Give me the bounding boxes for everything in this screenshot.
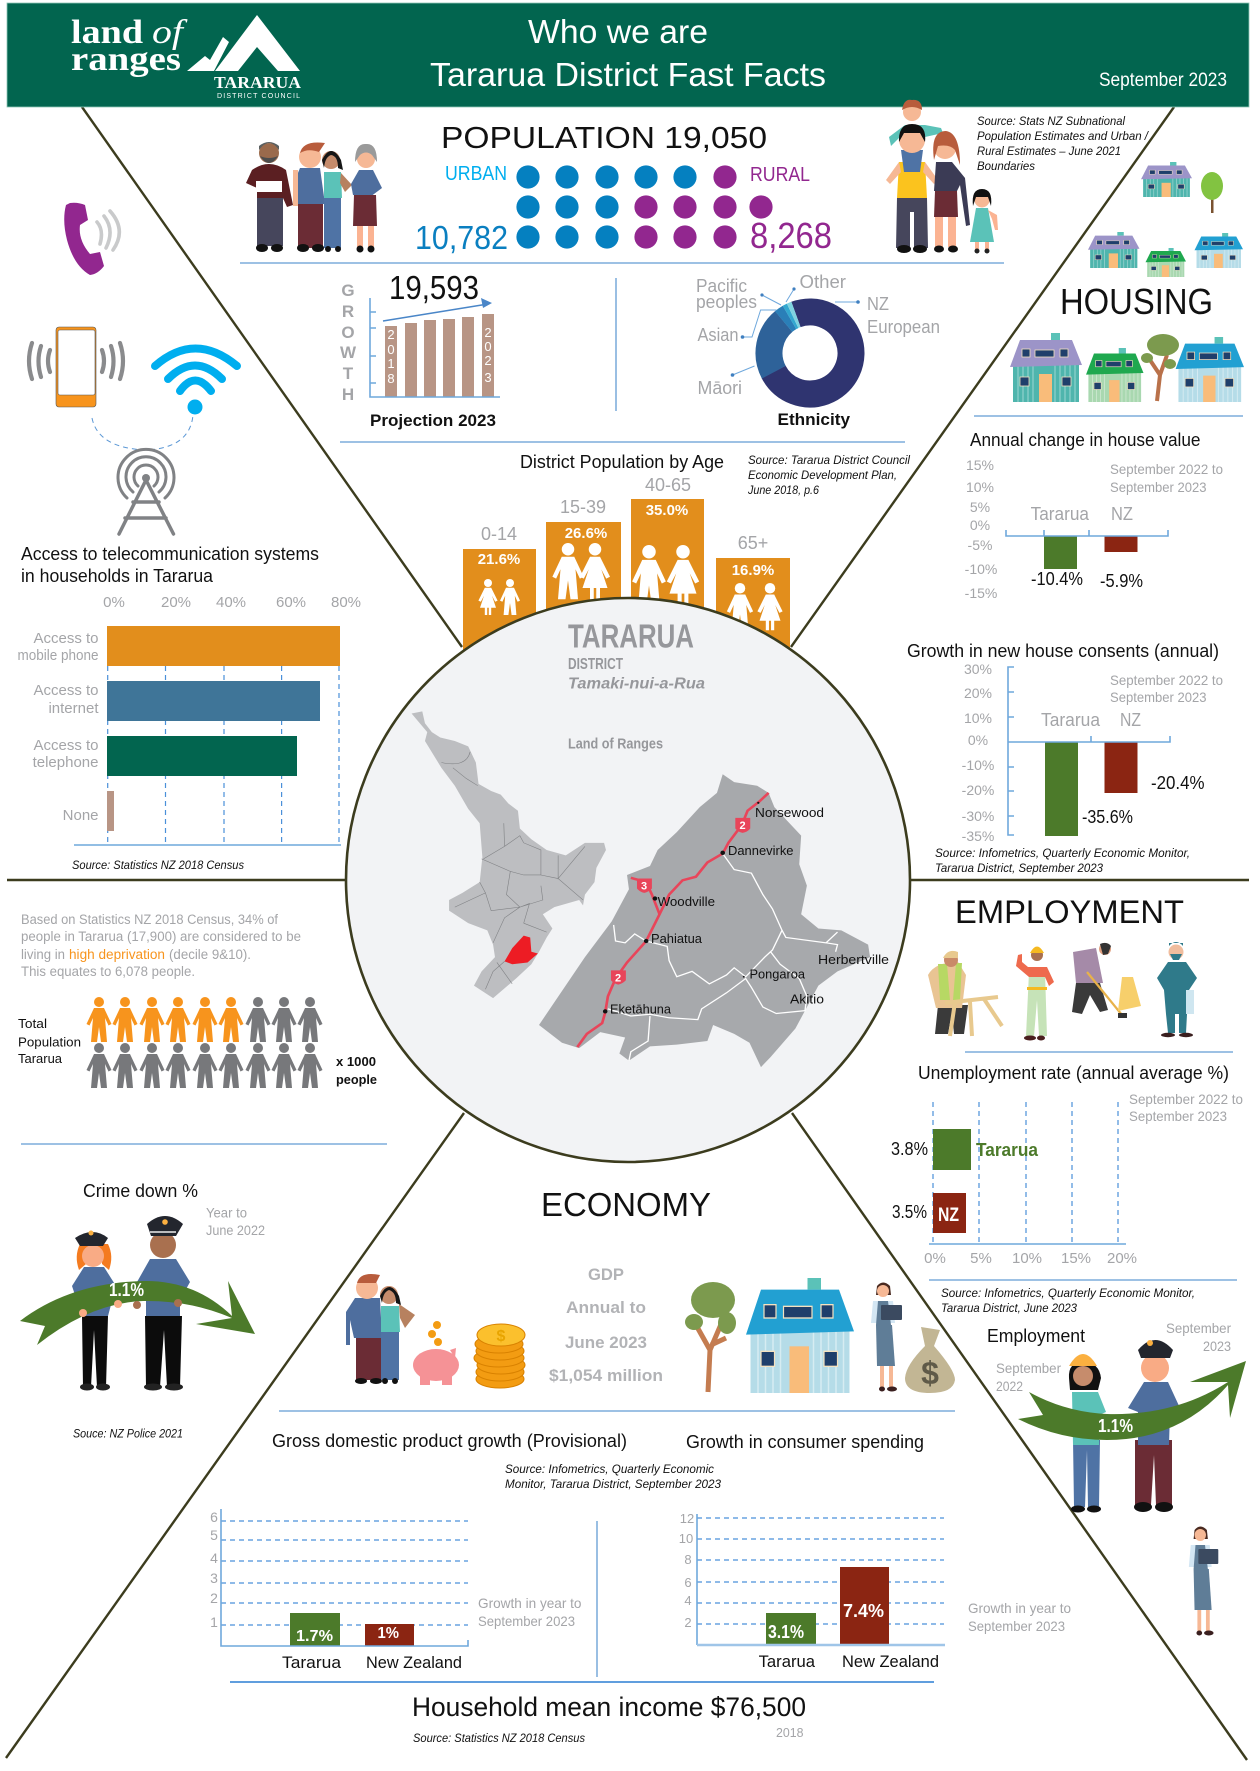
map: north island [412, 711, 606, 998]
urban vs rural dot chart: URBAN [445, 163, 507, 185]
icon: workers [928, 942, 1197, 1040]
chart: growth in new house consents: 10% [964, 710, 992, 726]
chart: growth in new house consents: 20% [964, 685, 992, 701]
dates: employment growth: 2022 [996, 1378, 1023, 1394]
urban vs rural dot chart: RURAL [750, 164, 810, 186]
pictogram: population [18, 997, 377, 1088]
arrow: employment up: 1.1% [1098, 1416, 1133, 1436]
chart: consumer spending: 7.4% [843, 1601, 884, 1621]
bar chart: telecom access: internet [48, 700, 99, 717]
logo: land [71, 14, 143, 51]
chart: annual change in house value: NZ [1111, 504, 1133, 524]
chart: annual change in house value: -10% [965, 561, 997, 577]
age bars: 35.0% [646, 502, 688, 519]
chart: unemployment rate: September 2022 to [1129, 1091, 1243, 1107]
ethnicity donut chart: peoples [696, 292, 757, 312]
logo: DISTRICT COUNCIL [217, 93, 300, 100]
source: police: Souce: NZ Police 2021 [73, 1427, 183, 1441]
title: Who we are [528, 13, 708, 50]
household income: Household mean income $76,500 [412, 1692, 806, 1722]
age bars: 0-14 [481, 524, 517, 544]
pictogram: population: x 1000 [336, 1054, 376, 1069]
chart: GDP growth: 1% [378, 1625, 399, 1642]
chart: growth in new house consents: September 2022 to [1110, 672, 1223, 688]
icon: couple [346, 1274, 415, 1384]
source: age: June 2018, p.6 [747, 483, 819, 497]
heading: crime: Crime down % [83, 1181, 198, 1201]
panel: economy [210, 1186, 955, 1745]
chart: growth in new house consents: 30% [964, 661, 992, 677]
chart: consumer spending: 8 [684, 1552, 692, 1567]
chart: consumer spending: 2 [684, 1615, 692, 1630]
growth projection chart: H [342, 385, 354, 404]
heading: population: POPULATION 19,050 [441, 120, 767, 155]
chart: consumer spending: New Zealand [842, 1652, 939, 1671]
chart: consumer spending: 10 [679, 1531, 693, 1546]
town labels: Pongaroa [750, 967, 806, 982]
text: deprivation: living in [21, 947, 65, 962]
heading: housing: HOUSING [1060, 281, 1213, 322]
dates: employment growth [996, 1320, 1231, 1394]
chart: growth in new house consents: -20.4% [1151, 773, 1204, 793]
town labels: Woodville [658, 894, 715, 909]
header banner [7, 3, 1249, 107]
panel: district map circle [346, 598, 910, 1162]
chart: unemployment rate: 15% [1061, 1250, 1091, 1267]
town labels: Herbertville [818, 952, 889, 967]
chart: growth in new house consents: -35% [962, 828, 994, 844]
ethnicity donut chart [696, 272, 940, 429]
heading: economy: ECONOMY [541, 1186, 711, 1223]
note: year to: Year to [206, 1204, 247, 1220]
logo: ranges [71, 41, 181, 78]
source: age: Economic Development Plan, [748, 468, 897, 482]
urban vs rural dot chart: 10,782 [415, 219, 508, 256]
connection lines [92, 415, 193, 450]
pictogram: population: people [336, 1072, 377, 1087]
chart: unemployment rate: September 2023 [1129, 1108, 1227, 1124]
chart: unemployment rate: 20% [1107, 1250, 1137, 1267]
chart: annual change in house value: 5% [970, 499, 990, 515]
text: deprivation: high deprivation [69, 947, 165, 962]
town labels [610, 805, 889, 1017]
bar chart: telecom access: None [63, 807, 98, 824]
bar chart: telecom access: 40% [216, 594, 246, 611]
text: deprivation: (decile 9&10). [169, 947, 251, 962]
dates: employment growth: September [996, 1360, 1061, 1376]
arrow: employment up [1018, 1361, 1246, 1440]
chart: growth in new house consents: Tararua [1041, 710, 1101, 730]
chart: consumer spending: 12 [680, 1511, 694, 1526]
chart: GDP growth: 6 [210, 1509, 218, 1525]
dates: employment growth: 2023 [1203, 1338, 1231, 1354]
chart: unemployment rate: 5% [970, 1250, 992, 1267]
text: GDP: $1,054 million [549, 1366, 663, 1385]
chart: GDP growth: September 2023 [478, 1613, 575, 1629]
map title: Tamaki-nui-a-Rua [568, 676, 705, 693]
dates: employment growth: September [1166, 1320, 1231, 1336]
source: employment: Tararua District, June 2023 [941, 1301, 1077, 1315]
source: population: Source: Stats NZ Subnational [977, 114, 1125, 128]
chart: annual change in house value: 10% [966, 479, 994, 495]
icon: money bag [905, 1327, 955, 1393]
bar chart: telecom access: Access to [33, 737, 98, 754]
chart: GDP growth: New Zealand [366, 1653, 462, 1672]
growth projection chart: R [342, 302, 354, 321]
logo [71, 14, 302, 100]
panel: telecommunications [18, 203, 361, 872]
source: population: Population Estimates and Urban / [977, 129, 1150, 143]
age bars: 15-39 [560, 497, 606, 517]
chart: unemployment rate [891, 1063, 1243, 1267]
household income: 2018 [776, 1725, 804, 1740]
chart: annual change in house value: -5% [968, 537, 992, 553]
chart: unemployment rate: 10% [1012, 1250, 1042, 1267]
growth projection chart: 2 [387, 327, 395, 342]
source: employment [941, 1286, 1195, 1315]
chart: unemployment rate: NZ [938, 1205, 959, 1226]
chart: annual change in house value: -15% [965, 585, 997, 601]
age bars: 40-65 [645, 475, 691, 495]
map title: Land of Ranges [568, 736, 663, 753]
growth projection chart: O [341, 323, 355, 342]
growth projection chart: T [343, 364, 354, 383]
chart: consumer spending: 3.1% [768, 1622, 804, 1642]
town labels: Dannevirke [728, 843, 794, 858]
chart: growth in new house consents: -30% [962, 808, 994, 824]
text: deprivation [21, 912, 301, 979]
chart: growth in new house consents: September 2023 [1110, 689, 1207, 705]
chart: annual change in house value: Annual change in house value [970, 430, 1200, 450]
icon: small houses [1088, 162, 1243, 277]
road shield numbers: 2 [615, 972, 621, 984]
bar chart: telecom access: 0% [103, 594, 125, 611]
date: September 2023 [1099, 70, 1227, 91]
chart: growth in new house consents: -10% [962, 757, 994, 773]
growth projection chart: 3 [484, 370, 492, 385]
map: tararua district [539, 774, 870, 1067]
source: housing: Tararua District, September 2023 [935, 861, 1103, 875]
chart: unemployment rate: 3.5% [892, 1202, 927, 1222]
icon: house [746, 1278, 854, 1393]
age bars [463, 475, 790, 688]
note: growth in year: September 2023 [968, 1618, 1065, 1634]
ethnicity donut chart: European [867, 317, 940, 337]
note: growth in year [968, 1600, 1071, 1634]
icon: tree [685, 1282, 736, 1392]
chart: GDP growth: 4 [210, 1550, 218, 1566]
bar chart: telecom access: mobile phone [18, 647, 98, 664]
text: GDP: GDP [588, 1265, 624, 1284]
icon: businesswoman [871, 1282, 902, 1392]
source: telecom: Source: Statistics NZ 2018 Census [72, 858, 244, 872]
source: income: Source: Statistics NZ 2018 Census [413, 1731, 585, 1745]
icon: coin stack [474, 1324, 525, 1388]
chart: GDP growth [210, 1431, 627, 1672]
source: employment: Source: Infometrics, Quarterly Economic Monitor, [941, 1286, 1195, 1300]
logo: TARARUA [214, 73, 302, 92]
pictogram: population: Tararua [18, 1051, 63, 1066]
panel: deprivation and crime [18, 912, 387, 1441]
growth projection chart [340, 269, 500, 430]
title [430, 13, 826, 93]
road shield numbers: 2 [739, 820, 746, 832]
text: GDP: June 2023 [565, 1333, 647, 1352]
chart: annual change in house value: September 2022 to [1110, 461, 1223, 477]
chart: GDP growth: 1.7% [296, 1628, 333, 1645]
panel: housing [907, 162, 1244, 875]
arrow: crime down: 1.1% [109, 1280, 144, 1300]
panel: age chart [463, 452, 910, 688]
arrow: crime down [20, 1280, 255, 1345]
source: population [977, 114, 1150, 173]
text: deprivation: Based on Statistics NZ 2018 Census, 34% of [21, 912, 278, 927]
source: economy [505, 1462, 721, 1491]
pictogram: population: Total [18, 1016, 47, 1031]
source: age [747, 453, 910, 497]
chart: growth in new house consents: -35.6% [1082, 807, 1133, 827]
growth projection chart: 19,593 [389, 269, 479, 306]
chart: consumer spending: 6 [684, 1575, 692, 1590]
bar chart: telecom access: telephone [33, 754, 98, 771]
age bars: 16.9% [732, 562, 774, 579]
source: economy: Source: Infometrics, Quarterly Economic [505, 1462, 714, 1476]
growth projection chart: G [341, 281, 355, 300]
chart: unemployment rate: Tararua [976, 1140, 1039, 1160]
text: deprivation: people in Tararua (17,900) are considered to be [21, 929, 301, 944]
note: year to: June 2022 [206, 1222, 265, 1238]
growth projection chart: 2 [484, 325, 492, 340]
title: Tararua District Fast Facts [430, 56, 826, 93]
chart: consumer spending [679, 1432, 945, 1671]
growth projection chart: 8 [387, 371, 395, 386]
urban vs rural dot chart [415, 163, 832, 256]
pictogram: population: Population [18, 1034, 81, 1050]
icon: mobile phone [29, 327, 123, 407]
text: GDP [549, 1265, 663, 1385]
source: economy: Monitor, Tararua District, September 2023 [505, 1477, 721, 1491]
bar chart: telecom access: 20% [161, 594, 191, 611]
chart: annual change in house value: 0% [970, 517, 990, 533]
chart: annual change in house value: Tararua [1031, 504, 1090, 524]
bar chart: telecom access: Access to [33, 682, 98, 699]
note: year to [206, 1204, 265, 1238]
logo: of [152, 14, 188, 51]
chart: GDP growth: 2 [210, 1590, 218, 1606]
town labels: Norsewood [755, 805, 824, 820]
growth projection chart: Projection 2023 [370, 411, 496, 430]
road shield numbers: 3 [641, 880, 647, 892]
icon: coin stack: $ [497, 1328, 506, 1345]
icon: telephone handset [64, 203, 119, 275]
town labels: Akitio [790, 992, 824, 1007]
heading: employment: EMPLOYMENT [955, 894, 1184, 930]
source: population: Boundaries [977, 159, 1035, 173]
heading: telecom [21, 544, 319, 586]
chart: consumer spending: Tararua [759, 1652, 816, 1671]
icon: wifi [155, 348, 237, 414]
chart: annual change in house value: -10.4% [1031, 569, 1083, 589]
town labels: Pahiatua [651, 931, 703, 946]
source: housing [935, 846, 1190, 875]
chart: GDP growth: Tararua [282, 1653, 342, 1672]
icon: businesswoman [1189, 1526, 1218, 1636]
age bars: 26.6% [565, 525, 607, 542]
icon: large houses and tree [1010, 333, 1244, 402]
map title [568, 618, 705, 753]
growth projection chart: 1 [387, 356, 395, 371]
age bars: 65+ [738, 533, 768, 553]
growth projection chart: 2 [484, 353, 492, 368]
town labels: Eketāhuna [610, 1002, 672, 1017]
heading: employment growth: Employment [987, 1326, 1085, 1346]
source: age: Source: Tararua District Council [748, 453, 910, 467]
icon: money bag: $ [921, 1355, 939, 1391]
ethnicity donut chart: Asian [698, 325, 738, 345]
chart: GDP growth: Gross domestic product growth (Provisional) [272, 1431, 627, 1451]
icon: police officers [72, 1216, 190, 1390]
urban vs rural dot chart: 8,268 [750, 215, 832, 256]
age bars: 21.6% [478, 551, 520, 568]
icon: radio tower [118, 449, 174, 534]
bar chart: telecom access: 60% [276, 594, 306, 611]
note: growth in year: Growth in year to [968, 1600, 1071, 1616]
ethnicity donut chart: Māori [698, 378, 742, 398]
ethnicity donut chart: Ethnicity [778, 410, 851, 429]
chart: growth in new house consents: 0% [968, 732, 988, 748]
source: housing: Source: Infometrics, Quarterly Economic Monitor, [935, 846, 1190, 860]
chart: annual change in house value [965, 430, 1223, 601]
chart: GDP growth: 5 [210, 1527, 218, 1543]
chart: annual change in house value: 15% [966, 457, 994, 473]
text: GDP: Annual to [566, 1298, 646, 1317]
panel: population [240, 100, 1150, 442]
chart: consumer spending: Growth in consumer spending [686, 1432, 924, 1452]
chart: consumer spending: 4 [684, 1593, 692, 1608]
chart: growth in new house consents: -20% [962, 782, 994, 798]
map title: DISTRICT [568, 656, 623, 673]
panel: employment [891, 894, 1246, 1636]
map title: TARARUA [568, 618, 694, 654]
chart: growth in new house consents: Growth in new house consents (annual) [907, 641, 1219, 661]
road shield numbers [615, 820, 746, 984]
growth projection chart: 0 [387, 342, 395, 357]
source: population: Rural Estimates – June 2021 [977, 144, 1121, 158]
icon: family [886, 100, 998, 253]
chart: growth in new house consents: NZ [1120, 710, 1141, 730]
chart: GDP growth: 3 [210, 1570, 218, 1586]
text: deprivation: This equates to 6,078 people. [21, 964, 195, 979]
chart: unemployment rate: Unemployment rate (annual average %) [918, 1063, 1229, 1083]
growth projection chart: 0 [484, 339, 492, 354]
growth projection chart: W [340, 343, 357, 362]
icon: piggy bank [413, 1321, 459, 1385]
icon: hard-hat worker and officer [1069, 1340, 1180, 1512]
bar chart: telecom access: Access to [33, 630, 98, 647]
chart: unemployment rate: 0% [924, 1250, 946, 1267]
chart: unemployment rate: 3.8% [891, 1139, 928, 1159]
chart: GDP growth: Growth in year to [478, 1595, 582, 1611]
heading: telecom: in households in Tararua [21, 566, 214, 586]
heading: telecom: Access to telecommunication systems [21, 544, 319, 564]
chart: annual change in house value: September 2023 [1110, 479, 1207, 495]
heading: age: District Population by Age [520, 452, 724, 472]
bar chart: telecom access: 80% [331, 594, 361, 611]
ethnicity donut chart: NZ [867, 294, 889, 314]
ethnicity donut chart: Other [800, 272, 846, 292]
ethnicity donut chart: Pacific [696, 276, 747, 296]
household income [412, 1692, 806, 1740]
icon: group of four people [246, 142, 382, 252]
chart: GDP growth: 1 [210, 1614, 218, 1630]
chart: growth in new house consents [907, 641, 1223, 844]
bar chart: telecom access [18, 594, 361, 845]
chart: annual change in house value: -5.9% [1100, 571, 1143, 591]
